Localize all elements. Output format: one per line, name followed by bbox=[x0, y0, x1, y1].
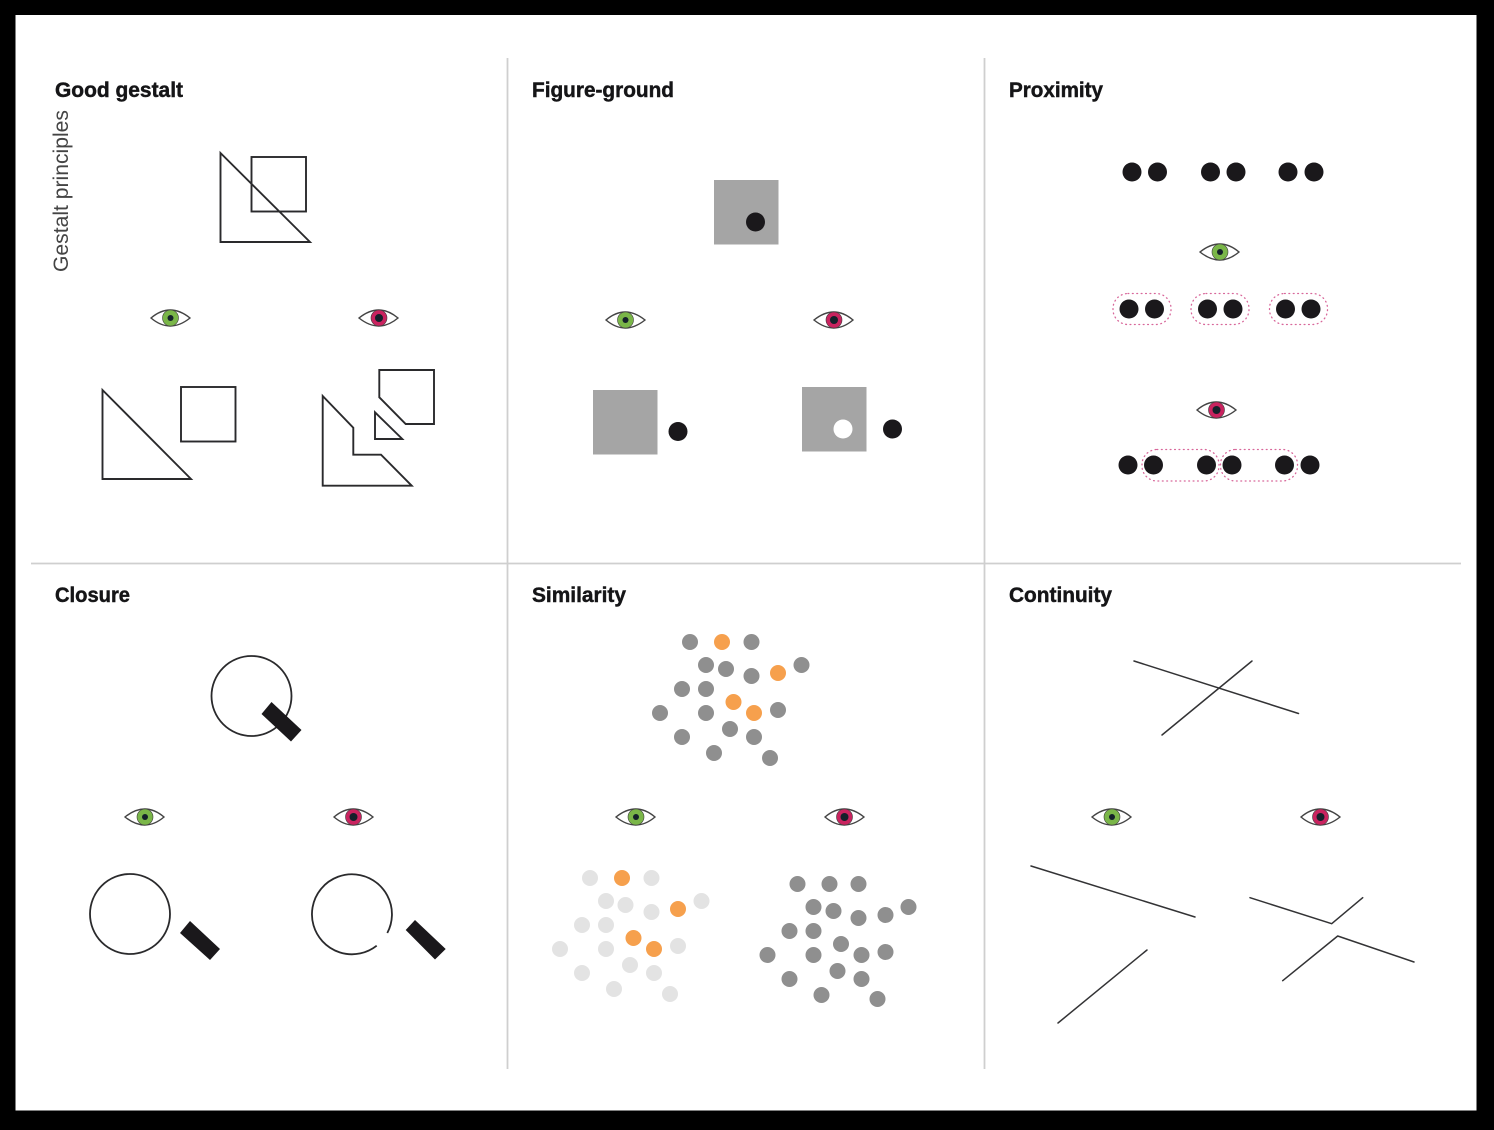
figure: dot pairs bbox=[1122, 162, 1324, 182]
heading: Similarity: Similarity bbox=[532, 584, 626, 607]
figure: square and separate dot bbox=[593, 390, 688, 454]
panel: Continuity bbox=[1009, 584, 1414, 1023]
heading: Closure: Closure bbox=[55, 584, 130, 607]
heading: Good gestalt: Good gestalt bbox=[55, 79, 183, 102]
icon: green eye bbox=[1200, 244, 1239, 260]
figure: two bent lines bbox=[1250, 898, 1414, 981]
icon: magenta eye bbox=[334, 809, 373, 825]
icon: green eye bbox=[606, 312, 645, 328]
icon: magenta eye bbox=[1301, 809, 1340, 825]
figure: broken circle and bar bbox=[312, 874, 446, 960]
figure: pairs grouped by proximity bbox=[1113, 294, 1328, 324]
icon: magenta eye bbox=[1197, 402, 1236, 418]
panel: Figure-ground bbox=[532, 79, 902, 454]
heading: Figure-ground: Figure-ground bbox=[532, 79, 674, 102]
figure: complete circle and bar bbox=[90, 874, 220, 960]
icon: magenta eye bbox=[825, 809, 864, 825]
figure: circle overlapped by bar bbox=[212, 656, 302, 742]
figure: pairs grouped wrongly bbox=[1118, 450, 1320, 481]
icon: green eye bbox=[151, 310, 190, 326]
figure: separate triangle and square bbox=[102, 387, 236, 479]
figure: crossing lines bbox=[1134, 661, 1298, 735]
figure: fragmented shapes bbox=[323, 370, 434, 486]
figure: square with hole and separate dot bbox=[802, 387, 902, 452]
side title: Gestalt principles: Gestalt principles bbox=[50, 110, 73, 272]
panel: Similarity bbox=[532, 584, 916, 1007]
icon: magenta eye bbox=[814, 312, 853, 328]
figure: orange dots highlighted bbox=[552, 870, 710, 1002]
icon: green eye bbox=[125, 809, 164, 825]
figure: overlapping triangle and square bbox=[220, 153, 310, 242]
icon: green eye bbox=[616, 809, 655, 825]
panel: Closure bbox=[55, 584, 446, 960]
figure: mixed grey and orange dots bbox=[652, 634, 810, 766]
heading: Continuity: Continuity bbox=[1009, 584, 1112, 607]
heading: Proximity: Proximity bbox=[1009, 79, 1103, 102]
figure: all grey dots bbox=[760, 876, 916, 1007]
panel: Good gestalt bbox=[55, 79, 434, 486]
panel: Proximity bbox=[1009, 79, 1328, 481]
icon: green eye bbox=[1092, 809, 1131, 825]
icon: magenta eye bbox=[359, 310, 398, 326]
figure: dot on grey square bbox=[714, 180, 778, 244]
figure: two separate straight lines bbox=[1031, 866, 1195, 1023]
